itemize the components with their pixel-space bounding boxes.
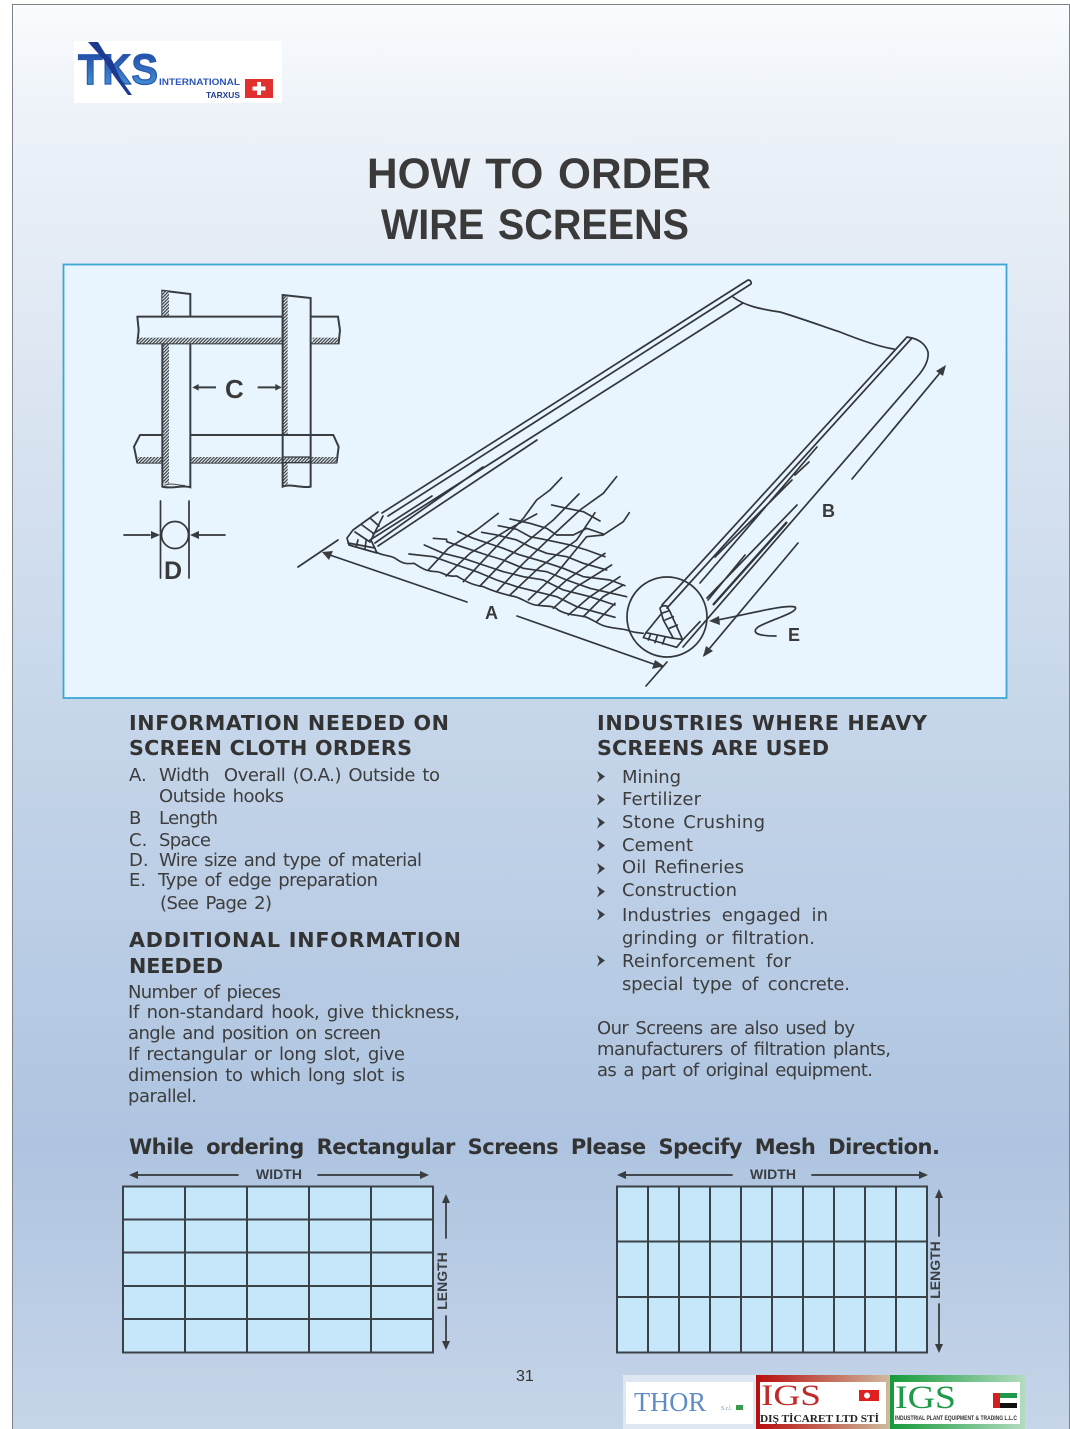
footer logo: IGS Industrial Plant Equipment: INDUSTRIAL PLANT EQUIPMENT & TRADING L.L.C xyxy=(895,1416,1018,1422)
diagram: mesh spacing detail C xyxy=(134,291,340,488)
heading xyxy=(597,711,928,760)
dimension arrow B: B xyxy=(822,501,835,521)
footer logo: IGS Dis Ticaret: IGS xyxy=(761,1379,821,1412)
grid: rectangular mesh with long openings across width xyxy=(123,1166,450,1352)
bullet list: Stone Crushing xyxy=(622,812,765,833)
length arrow: LENGTH xyxy=(927,1241,943,1299)
footer logo: IGS Dis Ticaret: DIŞ TİCARET LTD STİ xyxy=(760,1413,879,1425)
magnified hook circle xyxy=(627,577,707,657)
width arrow xyxy=(617,1166,928,1182)
logo: TKS International: INTERNATIONAL xyxy=(159,77,241,87)
diagram: wire diameter detail D: D xyxy=(164,557,182,585)
heading: INDUSTRIES WHERE HEAVY xyxy=(597,711,928,735)
dimension arrow A: A xyxy=(485,603,498,623)
diagram: screen cloth with hooked edges xyxy=(298,280,946,686)
bullet list: Oil Refineries xyxy=(622,857,744,878)
list A to E: B xyxy=(129,808,141,829)
bullet list: Reinforcement for xyxy=(622,951,792,972)
paragraph: original equipment: manufacturers of filtration plants, xyxy=(597,1039,891,1060)
list A to E: A. xyxy=(129,765,147,786)
paragraph: original equipment xyxy=(597,1018,891,1081)
list A to E xyxy=(129,765,440,914)
dimension arrow B xyxy=(703,365,946,657)
footer logo: THOR: S.r.l. xyxy=(721,1406,733,1412)
bullet list: special type of concrete. xyxy=(622,974,850,995)
dimension arrow A xyxy=(298,540,667,686)
text block: information needed on screen cloth orders xyxy=(129,711,449,914)
panel: wire screen diagram xyxy=(64,264,1006,698)
back edge of cloth xyxy=(733,297,894,349)
logo: TKS International: TARXUS xyxy=(206,90,240,100)
title: WIRE SCREENS xyxy=(381,201,689,249)
heading: INFORMATION NEEDED ON xyxy=(129,711,449,735)
title xyxy=(367,150,711,249)
bullet list: Mining xyxy=(622,767,681,788)
title: HOW TO ORDER xyxy=(367,150,711,198)
left hook rail xyxy=(347,280,751,553)
list A to E: Length xyxy=(159,808,218,829)
heading: SCREENS ARE USED xyxy=(597,736,829,760)
bullet list: Fertilizer xyxy=(622,789,702,810)
list A to E: D. xyxy=(129,850,149,871)
heading: NEEDED xyxy=(129,954,223,978)
heading xyxy=(129,711,449,760)
heading: mesh direction: While ordering Rectangular Screens Please Specify Mesh Direction. xyxy=(129,1135,940,1159)
text block: additional information needed xyxy=(128,928,461,1107)
bullet list: Industries engaged in xyxy=(622,905,828,926)
length arrow xyxy=(434,1194,450,1350)
footer logo: THOR xyxy=(623,1375,756,1429)
paragraph: If rectangular or long slot, give xyxy=(128,1044,405,1065)
list A to E: Type of edge preparation xyxy=(157,870,378,891)
page number: 31 xyxy=(516,1368,534,1385)
list A to E: E. xyxy=(129,870,146,891)
list A to E: Wire size and type of material xyxy=(159,850,422,871)
woven mesh xyxy=(377,477,643,633)
footer logo: THOR: THOR xyxy=(634,1387,706,1417)
list A to E: Space xyxy=(159,830,211,851)
list A to E: Outside hooks xyxy=(159,786,284,807)
right hook rail xyxy=(662,337,928,647)
bullet list: Construction xyxy=(622,880,737,901)
bullet list xyxy=(597,767,850,995)
length arrow xyxy=(927,1189,943,1353)
list A to E: (See Page 2) xyxy=(160,893,272,914)
footer logo: IGS Industrial Plant Equipment xyxy=(890,1375,1025,1429)
footer logo: IGS Dis Ticaret xyxy=(756,1375,890,1429)
callout arrow E: E xyxy=(788,625,800,645)
width arrow: WIDTH xyxy=(256,1166,302,1182)
list A to E: Width Overall (O.A.) Outside to xyxy=(159,765,440,786)
logo: TKS International xyxy=(74,41,282,103)
heading xyxy=(129,928,461,978)
paragraph: original equipment: as a part of original equipment. xyxy=(597,1060,873,1081)
paragraph: Number of pieces xyxy=(128,982,281,1003)
paragraph: dimension to which long slot is xyxy=(128,1065,405,1086)
width arrow xyxy=(129,1166,429,1182)
diagram: wire diameter detail D xyxy=(124,501,225,585)
paragraph: original equipment: Our Screens are also used by xyxy=(597,1018,855,1039)
callout arrow E xyxy=(709,606,800,645)
paragraph: If non-standard hook, give thickness, xyxy=(128,1002,460,1023)
heading: ADDITIONAL INFORMATION xyxy=(129,928,461,952)
paragraph: angle and position on screen xyxy=(128,1023,381,1044)
paragraph: parallel. xyxy=(128,1086,197,1107)
heading: SCREEN CLOTH ORDERS xyxy=(129,736,412,760)
text block: industries where heavy screens are used xyxy=(597,711,928,1081)
bullet list: Cement xyxy=(622,835,693,856)
footer logo: IGS Industrial Plant Equipment: IGS xyxy=(895,1380,956,1416)
length arrow: LENGTH xyxy=(434,1252,450,1310)
list A to E: C. xyxy=(129,830,147,851)
label: C: C xyxy=(225,374,244,404)
paragraph xyxy=(128,982,460,1107)
logo: TKS International: TKS xyxy=(78,46,158,94)
grid: rectangular mesh with long openings along length xyxy=(617,1166,943,1353)
bullet list: grinding or filtration. xyxy=(622,928,815,949)
width arrow: WIDTH xyxy=(750,1166,796,1182)
